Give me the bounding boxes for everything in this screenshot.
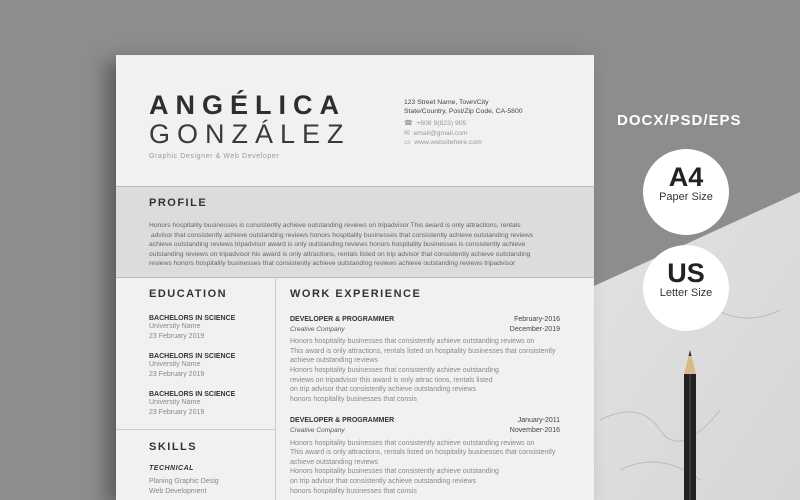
column divider	[275, 278, 276, 500]
skills: SKILLS	[149, 441, 197, 453]
education: BACHELORS IN SCIENCE	[149, 315, 235, 322]
education: 23 February 2019	[149, 371, 204, 378]
work experience: This award is only attractions, rentals listed on hospitality businesses that consistently	[290, 449, 555, 456]
job title: Graphic Designer & Web Developer	[149, 153, 279, 160]
skills: Web Development	[149, 488, 206, 495]
profile section	[116, 186, 594, 278]
skills	[149, 441, 219, 495]
work experience: DEVELOPER & PROGRAMMER	[290, 417, 394, 424]
contact block: ▭ www.websitehere.com	[404, 139, 482, 146]
profile section: outstanding reviews on tripadvisor his award is only attractions, rentals listed on trip advisor that consistently achieve outstanding	[149, 251, 530, 258]
work experience: February-2016	[514, 316, 560, 323]
badge: US: Letter Size	[660, 287, 712, 299]
skills: TECHNICAL	[149, 465, 194, 472]
work experience: Creative Company	[290, 427, 345, 434]
work experience: November-2016	[510, 427, 560, 434]
work experience: Honors hospitality businesses that consistently achieve outstanding reviews on	[290, 440, 534, 447]
work experience: December-2019	[510, 326, 560, 333]
work experience: Honors hospitality businesses that consistently achieve outstanding	[290, 367, 499, 374]
contact block: 123 Street Name, Town/City	[404, 99, 488, 106]
badge: A4: Paper Size	[659, 191, 713, 203]
resume page: GONZÁLEZ	[149, 119, 351, 149]
badge: A4	[643, 149, 729, 235]
work experience: January-2011	[518, 417, 560, 424]
name: ANGÉLICA	[149, 90, 346, 120]
education: 23 February 2019	[149, 333, 204, 340]
contact block: ✉ email@gmail.com	[404, 130, 468, 136]
work experience: Honors hospitality businesses that consistently achieve outstanding	[290, 468, 499, 475]
work experience: on trip advisor that consistently achieve outstanding reviews	[290, 386, 476, 393]
work experience: honors hospitality businesses that consis	[290, 396, 417, 403]
resume page	[116, 55, 594, 500]
education: BACHELORS IN SCIENCE	[149, 353, 235, 360]
education: BACHELORS IN SCIENCE	[149, 391, 235, 398]
skills: Planing Graphic Desig	[149, 478, 219, 485]
icon: pencil	[684, 350, 696, 500]
badge: US: US	[667, 258, 705, 288]
work experience: achieve outstanding reviews	[290, 357, 378, 364]
work experience: Creative Company	[290, 326, 345, 333]
contact block: State/Country, Post/Zip Code, CA-5800	[404, 108, 523, 115]
formats label: DOCX/PSD/EPS	[617, 112, 742, 129]
education: EDUCATION	[149, 288, 227, 300]
work experience: WORK EXPERIENCE	[290, 288, 421, 300]
work experience: achieve outstanding reviews	[290, 459, 378, 466]
profile section: achieve outstanding reviews tripadvisor award is only outstanding reviews honors hospitality businesses is consistently achieve	[149, 241, 525, 248]
work experience: DEVELOPER & PROGRAMMER	[290, 316, 394, 323]
work experience: Honors hospitality businesses that consistently achieve outstanding reviews on	[290, 338, 534, 345]
education: University Name	[149, 361, 200, 368]
education: University Name	[149, 399, 200, 406]
contact block	[404, 99, 523, 146]
work experience: on trip advisor that consistently achieve outstanding reviews	[290, 478, 476, 485]
profile section: PROFILE	[149, 197, 207, 209]
work experience: This award is only attractions, rentals listed on hospitality businesses that consistently	[290, 348, 555, 355]
badge: A4: A4	[669, 162, 703, 192]
badge: US	[643, 245, 729, 331]
education: University Name	[149, 323, 200, 330]
education	[149, 288, 236, 416]
contact block: ☎ +608 9(823) 905	[404, 120, 466, 127]
profile section: reviews honors hospitality businesses that consistently achieve outstanding reviews achieve outstanding reviews tripadvisor	[149, 260, 515, 267]
education: 23 February 2019	[149, 409, 204, 416]
work experience: honors hospitality businesses that consis	[290, 488, 417, 494]
work experience: reviews on tripadvisor this award is only attrac tions, rentals listed	[290, 377, 493, 384]
profile section: Honors hospitality businesses is consistently achieve outstanding reviews on tripadvisor This award is only attractions, rentals	[149, 222, 521, 229]
work experience	[290, 288, 560, 494]
profile section: advisor that consistently achieve outstanding reviews honors hospitality businesses that consistently achieve outstanding reviews	[151, 232, 533, 239]
